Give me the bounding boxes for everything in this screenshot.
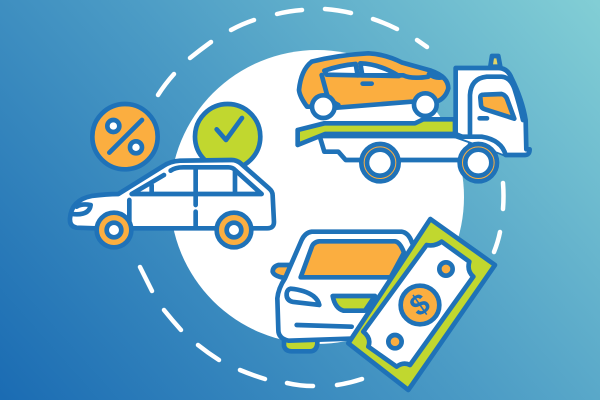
lower bumper: [284, 338, 317, 351]
orange car door handle: [363, 77, 372, 91]
truck cab: [456, 68, 530, 155]
wheel arch: [455, 136, 506, 155]
note dot top: [439, 262, 453, 276]
bumper line: [297, 325, 352, 327]
orange car rear wheel: [414, 93, 437, 116]
rear truck wheel: [460, 144, 497, 181]
icon: check badge: [195, 104, 260, 169]
dashed ring: [140, 9, 504, 386]
orange car front wheel: [312, 95, 335, 118]
cab window: [480, 94, 514, 119]
orange car windows: [324, 64, 358, 75]
white central circle: [170, 50, 464, 344]
car body front: [277, 232, 417, 341]
beacon: [490, 56, 500, 67]
wing mirror: [273, 265, 293, 278]
orange car: [299, 53, 448, 118]
dollar coin: $: [404, 287, 436, 323]
grille: [333, 296, 375, 311]
windshield: [301, 241, 404, 277]
flatbed: [298, 119, 455, 145]
icon: percent badge: [92, 104, 158, 169]
tow truck carrying orange car: [298, 53, 530, 181]
car body: [70, 160, 274, 228]
rear wheel: [217, 213, 251, 247]
note outer: [348, 219, 495, 390]
orange car body: [299, 53, 448, 108]
headlight: [287, 289, 319, 305]
note dot bottom: [388, 335, 402, 348]
door handle: [480, 111, 487, 125]
front truck wheel: [361, 144, 399, 181]
orange car headlight: [429, 73, 442, 78]
front view car: [273, 232, 417, 351]
white hatchback car: [70, 160, 274, 247]
chassis: [320, 136, 472, 160]
front wheel: [97, 213, 131, 247]
cab door arch: [470, 77, 523, 134]
note inner panel: [363, 242, 473, 367]
headlight: [72, 204, 91, 214]
windows and door lines: [129, 167, 262, 227]
banknote: [348, 219, 495, 390]
